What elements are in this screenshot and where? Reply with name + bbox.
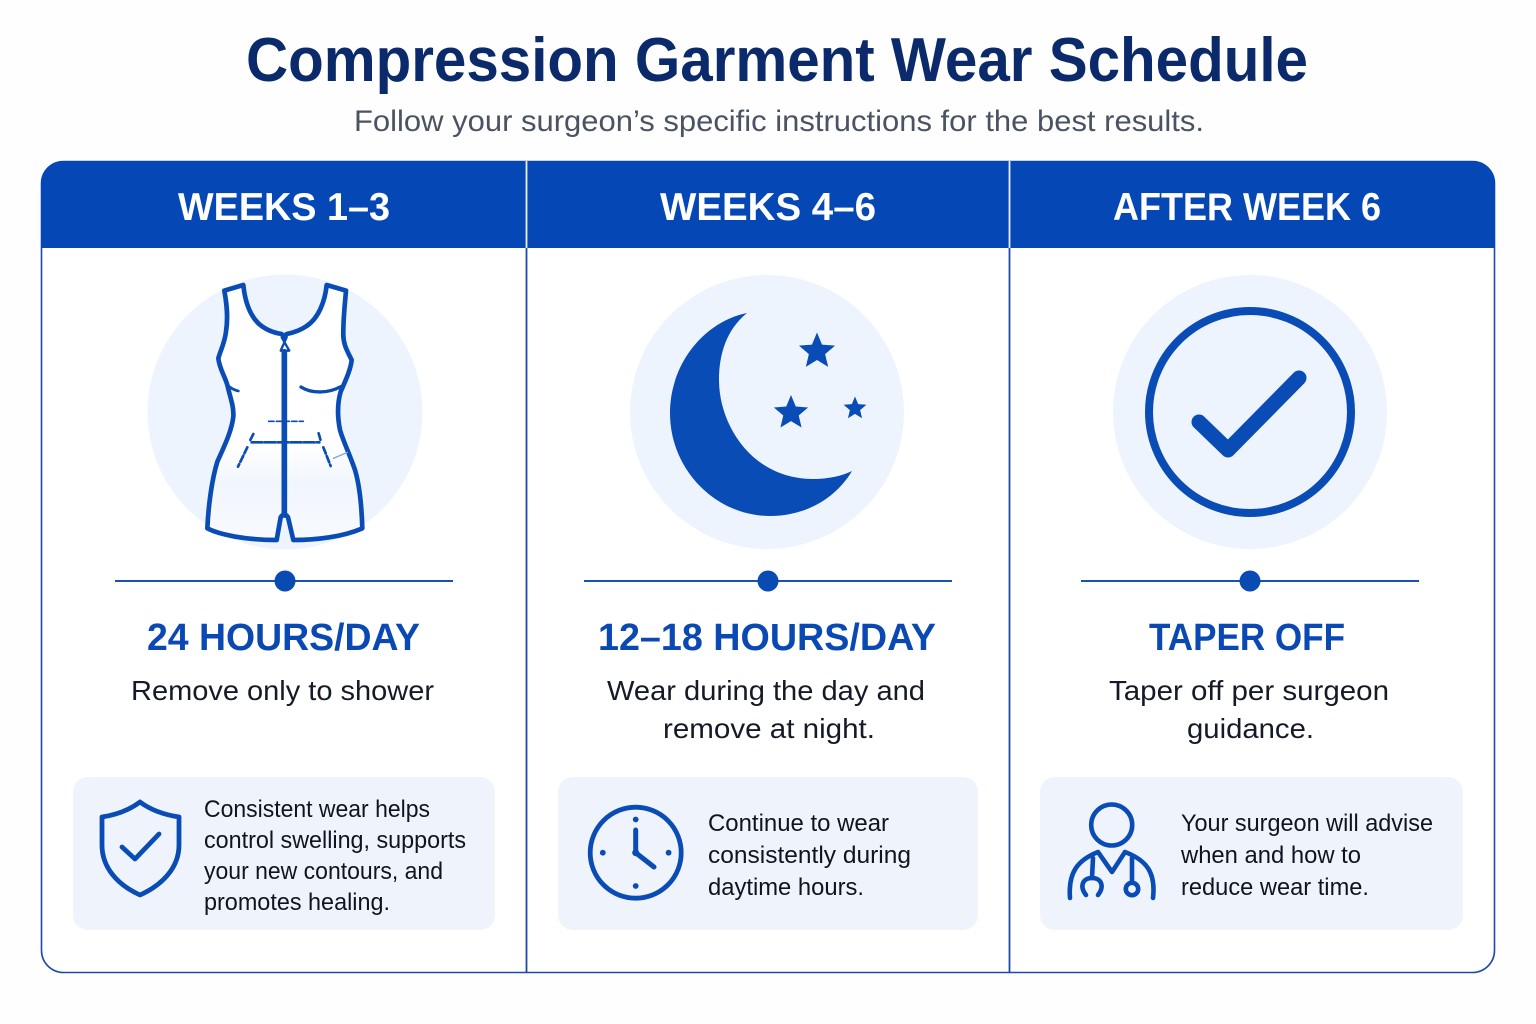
info text: when and how to [1180, 842, 1361, 869]
instruction text: Wear during the day and [607, 675, 925, 706]
instruction text [607, 675, 925, 744]
info box: surgeon advice [1040, 777, 1463, 930]
icon: moon and stars [630, 275, 904, 549]
heading: after week 6: AFTER WEEK 6 [1113, 186, 1381, 229]
info text: reduce wear time. [1181, 874, 1369, 901]
schedule table frame [41, 161, 1495, 973]
timeline marker [1081, 570, 1419, 592]
info box: daytime wear [558, 777, 978, 930]
timeline marker [115, 570, 453, 592]
info text: Consistent wear helps [204, 796, 430, 823]
wear hours: 12-18 hours: 12–18 HOURS/DAY [598, 617, 936, 659]
icon: doctor with stethoscope [1070, 804, 1154, 898]
info text [204, 796, 466, 916]
info text: consistently during [708, 842, 911, 869]
panel: weeks 1-3 [73, 186, 495, 930]
instruction text: Taper off per surgeon [1109, 675, 1389, 706]
wear hours: taper off: TAPER OFF [1149, 617, 1345, 659]
wear hours: 24 hours: 24 HOURS/DAY [147, 617, 420, 659]
icon: compression garment [148, 274, 422, 550]
subtitle: Follow your surgeon’s specific instructions for the best results. [354, 105, 1204, 138]
heading: weeks 1-3: WEEKS 1–3 [178, 186, 390, 229]
info text: your new contours, and [204, 858, 443, 885]
info text: daytime hours. [708, 874, 864, 901]
info box: consistent wear [73, 777, 495, 930]
title: Compression Garment Wear Schedule [246, 26, 1308, 95]
panel: after week 6 [1040, 186, 1463, 930]
icon: check mark circle [1113, 275, 1387, 549]
icon: clock [590, 807, 681, 898]
info text [1180, 810, 1433, 901]
heading: weeks 4-6: WEEKS 4–6 [660, 186, 876, 229]
instruction text: Remove only to shower [131, 675, 434, 706]
info text: promotes healing. [204, 889, 390, 916]
instruction text [1109, 675, 1389, 744]
panel: weeks 4-6 [558, 186, 978, 930]
info text: Your surgeon will advise [1181, 810, 1433, 837]
icon: shield with check [102, 802, 179, 895]
timeline marker [584, 570, 952, 592]
info text [708, 810, 911, 901]
info text: control swelling, supports [204, 827, 466, 854]
instruction text: guidance. [1187, 713, 1314, 744]
instruction text: remove at night. [663, 713, 875, 744]
info text: Continue to wear [708, 810, 889, 837]
